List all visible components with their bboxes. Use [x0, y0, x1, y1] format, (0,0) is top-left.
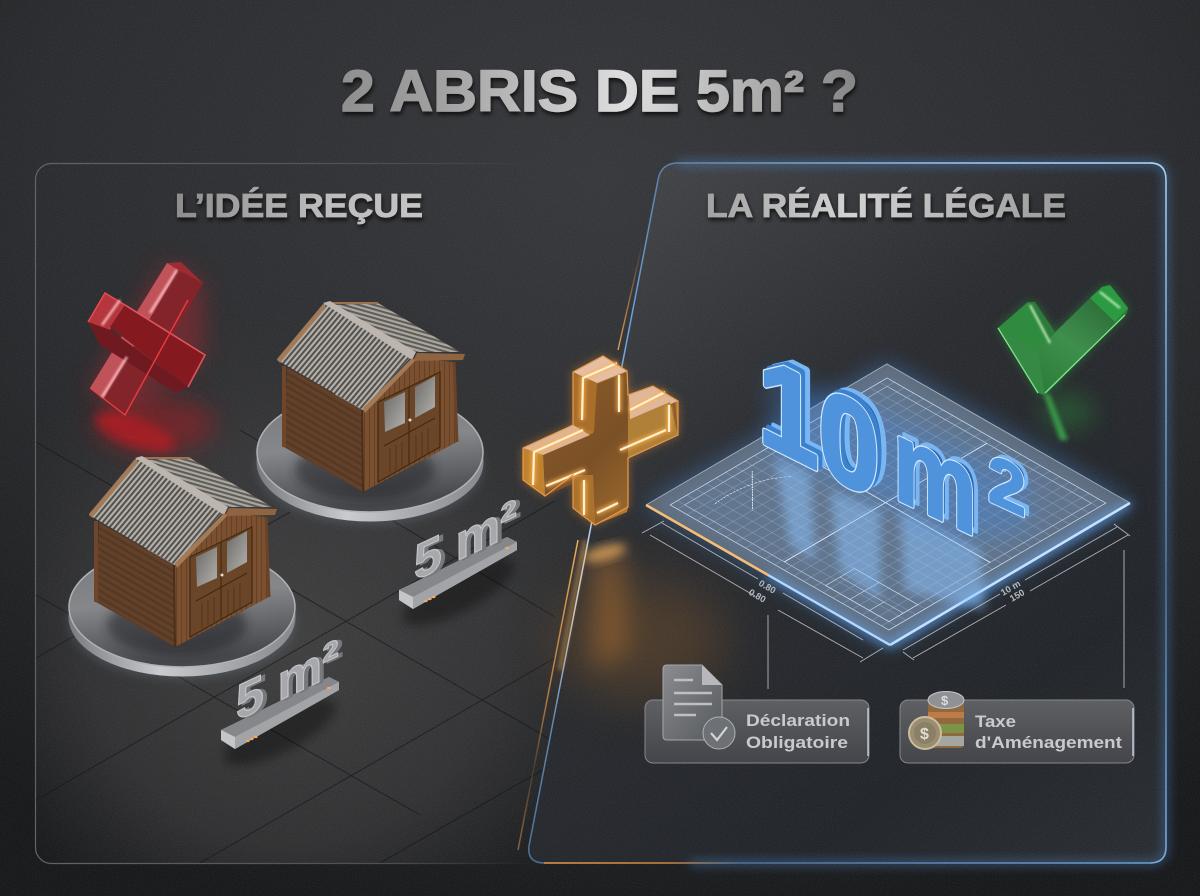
- floor reflections: [775, 458, 985, 610]
- plate: [221, 677, 339, 749]
- dimension labels: 10 m: [999, 579, 1022, 598]
- icon: green check: [998, 285, 1128, 440]
- label: 5 m² back: 5 m²: [418, 488, 521, 592]
- back bar: [90, 262, 203, 415]
- blueprint plan: [646, 364, 1130, 645]
- number 10: 10: [758, 329, 879, 528]
- unit m²: 2: [992, 437, 1030, 531]
- label: 5 m² front: 5 m²: [240, 628, 343, 732]
- badge: taxe d'aménagement: [900, 692, 1134, 763]
- connector lines: [768, 550, 1124, 689]
- dimension labels: 0.80: [757, 578, 778, 596]
- badge: déclaration obligatoire: Déclaration: [746, 711, 850, 730]
- floor tiles: [36, 430, 560, 863]
- orange divider glow: [518, 245, 642, 850]
- unit m²: 2: [988, 439, 1026, 533]
- platform disc: [256, 392, 484, 524]
- icon: red cross: [88, 262, 215, 460]
- number 10: 10: [767, 324, 888, 523]
- icon: orange plus: [523, 356, 725, 700]
- label: 5 m² front: 5 m²: [236, 628, 339, 732]
- unit m²: m: [898, 387, 982, 559]
- badge: déclaration obligatoire: [645, 665, 869, 763]
- number 10: 10: [762, 326, 883, 525]
- title: 2 ABRIS DE 5m² ?: [341, 59, 858, 124]
- neon lines: [102, 270, 177, 397]
- icon: coins: [909, 692, 964, 749]
- label: 5 m² back: 5 m²: [414, 488, 517, 592]
- icon: coins: $: [920, 726, 929, 743]
- unit m²: m: [893, 390, 977, 562]
- label: 5 m² back: [394, 488, 522, 638]
- panel: la réalité légale: [529, 163, 1166, 863]
- edges: [890, 503, 1130, 645]
- neon strokes: [533, 363, 669, 515]
- shed body: [284, 358, 457, 492]
- sheet: [646, 364, 1130, 644]
- unit m²: m: [893, 390, 977, 562]
- icon: document: [663, 665, 735, 749]
- badge: taxe d'aménagement: Taxe: [975, 712, 1016, 731]
- neon glow: [533, 363, 669, 515]
- horizontal bar: [88, 293, 125, 330]
- panel: l'idée reçue: [35, 164, 625, 864]
- heading: la réalité légale: LA RÉALITÉ LÉGALE: [706, 187, 1066, 224]
- plus reflection and glow: [523, 356, 725, 700]
- dimension labels: 150: [1008, 587, 1026, 604]
- shed and platform, front: [68, 456, 296, 679]
- badge: taxe d'aménagement: d'Aménagement: [975, 733, 1122, 752]
- unit m²: 2: [988, 439, 1026, 533]
- badge: déclaration obligatoire: Obligatoire: [746, 733, 848, 752]
- unit m²: [893, 387, 1030, 562]
- shed roof: [277, 301, 465, 413]
- label: 5 m² front: [216, 628, 344, 778]
- dimension lines: [642, 521, 1130, 662]
- icon: 10 m²: [758, 324, 1030, 562]
- dimension labels: 0.80: [747, 587, 768, 605]
- icon: coins: $: [941, 693, 949, 708]
- dimension labels: [747, 578, 1026, 605]
- heading: l'idée reçue: L’IDÉE REÇUE: [175, 187, 423, 224]
- plate: [399, 537, 517, 609]
- number 10: 10: [758, 329, 879, 528]
- shed and platform, back: [256, 301, 484, 524]
